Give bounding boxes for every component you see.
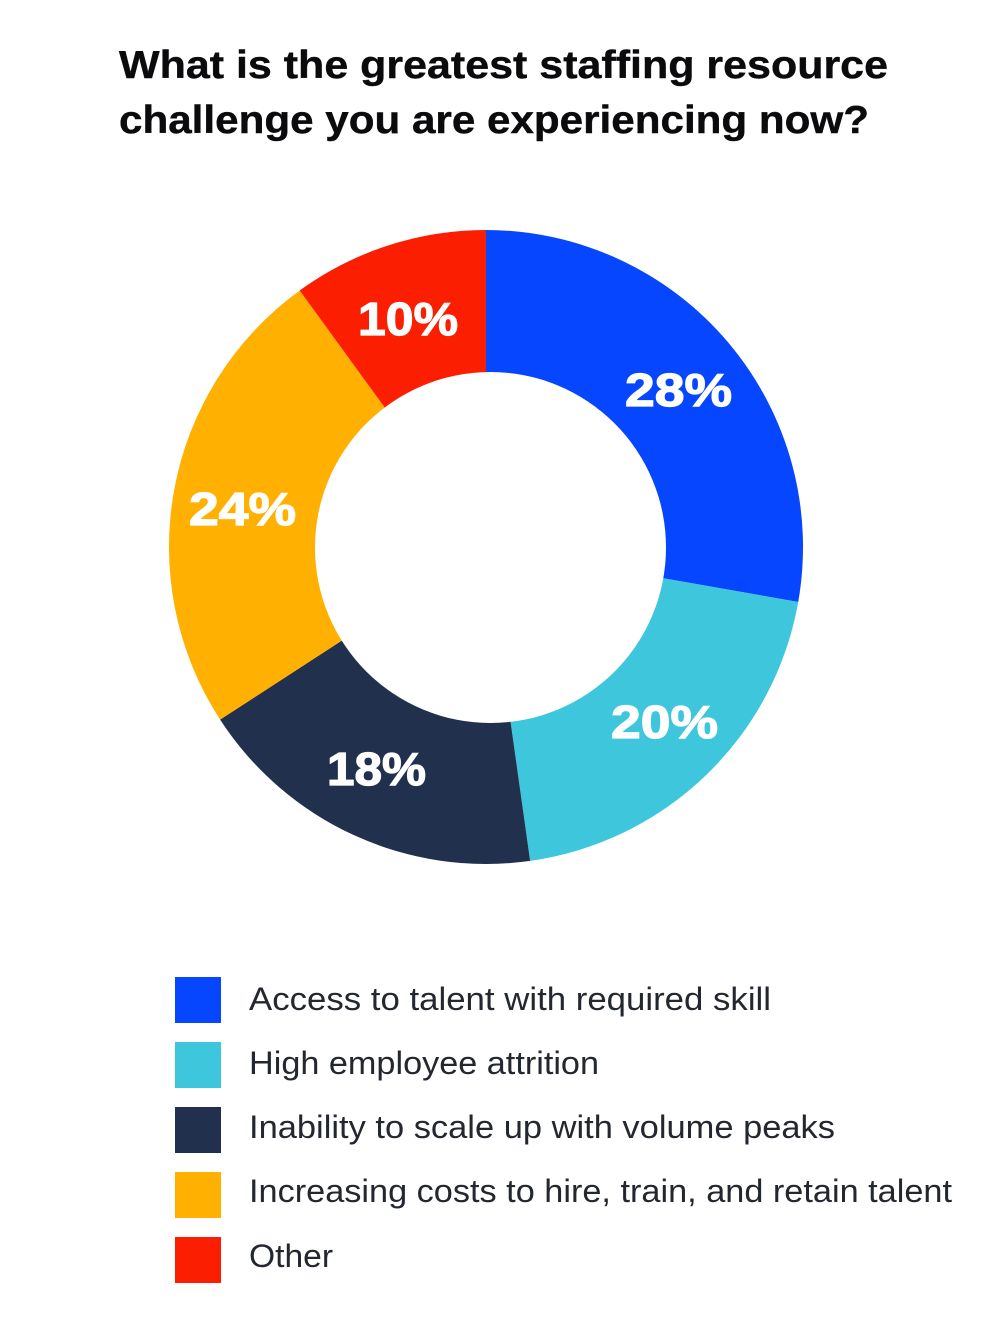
legend item: high employee attrition: High employee attrition <box>249 1045 599 1081</box>
legend item: increasing costs <box>175 1172 952 1218</box>
segment: other 10% <box>300 230 486 547</box>
value labels: 28% <box>625 364 732 416</box>
title: What is the greatest staffing resource <box>119 44 888 87</box>
donut chart <box>169 230 803 864</box>
legend item: access to talent <box>175 977 771 1023</box>
value labels: 10% <box>358 293 458 345</box>
legend item: increasing costs: Increasing costs to hire, train, and retain talent <box>249 1173 952 1209</box>
title: challenge you are experiencing now? <box>119 99 869 142</box>
legend item: high employee attrition <box>175 1042 599 1088</box>
value labels: 18% <box>327 743 426 795</box>
value labels: 20% <box>611 696 718 748</box>
legend item: inability to scale <box>175 1107 835 1153</box>
title <box>119 44 888 142</box>
legend item: other: Other <box>249 1238 333 1274</box>
legend <box>175 977 952 1283</box>
donut hole <box>315 372 666 723</box>
segment: increasing costs 24% <box>169 290 486 720</box>
segment: access to talent 28% <box>486 230 803 602</box>
legend item: other <box>175 1237 333 1283</box>
legend item: inability to scale: Inability to scale up with volume peaks <box>249 1109 835 1145</box>
value labels <box>189 293 732 795</box>
segment: inability to scale 18% <box>220 547 530 864</box>
value labels: 24% <box>189 483 296 535</box>
legend item: access to talent: Access to talent with required skill <box>249 981 771 1017</box>
segment: high employee attrition 20% <box>486 547 798 861</box>
